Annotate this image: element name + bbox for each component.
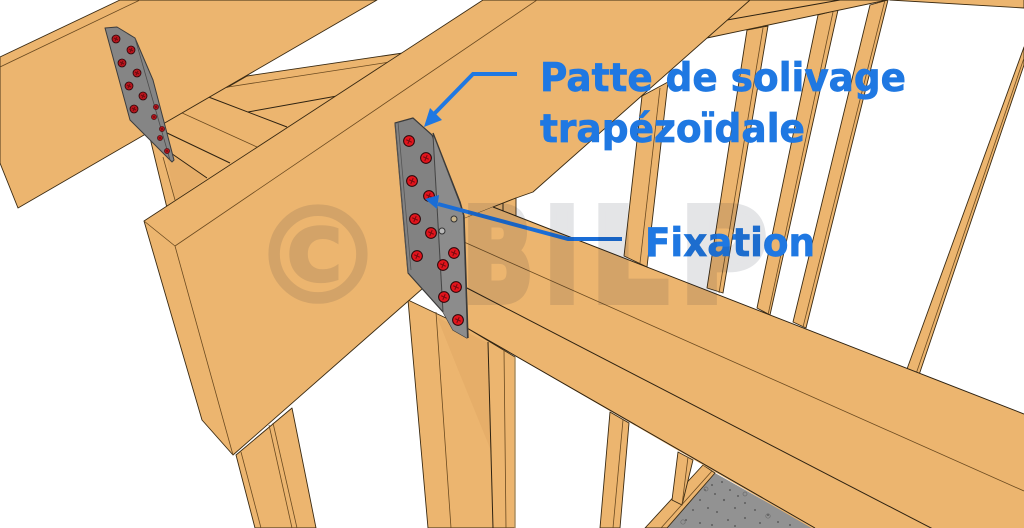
concrete slab [667,473,813,528]
watermark: copyright BILP: I [544,182,580,332]
main rafter [144,0,750,455]
watermark: copyright BILP: L [591,182,668,332]
label: trapézoïdale: trapézoïdale [540,107,805,152]
top plate of back wall [707,0,1024,38]
watermark: copyright BILP [250,178,767,335]
rear structure: joists and back post [150,53,403,208]
fasteners on main hanger [404,136,463,325]
watermark: copyright BILP: © [250,178,386,335]
arrow: to fastener [425,195,622,239]
back wall studs [624,0,1024,375]
label: fixation: Fixation [645,221,815,266]
left front post [236,408,316,528]
main joist hanger [395,118,468,338]
stud stub behind joist [493,198,516,216]
watermark: copyright BILP: B [462,182,534,332]
main post under rafter [408,300,515,528]
arrow: to hanger [424,74,517,127]
lower wall studs and bottom plate [600,412,715,528]
main joist beam [463,207,1024,528]
left rafter [0,0,377,208]
label: patte de solivage: Patte de solivage [540,56,906,101]
left joist hanger [105,27,174,162]
watermark: copyright BILP: P [680,182,767,332]
